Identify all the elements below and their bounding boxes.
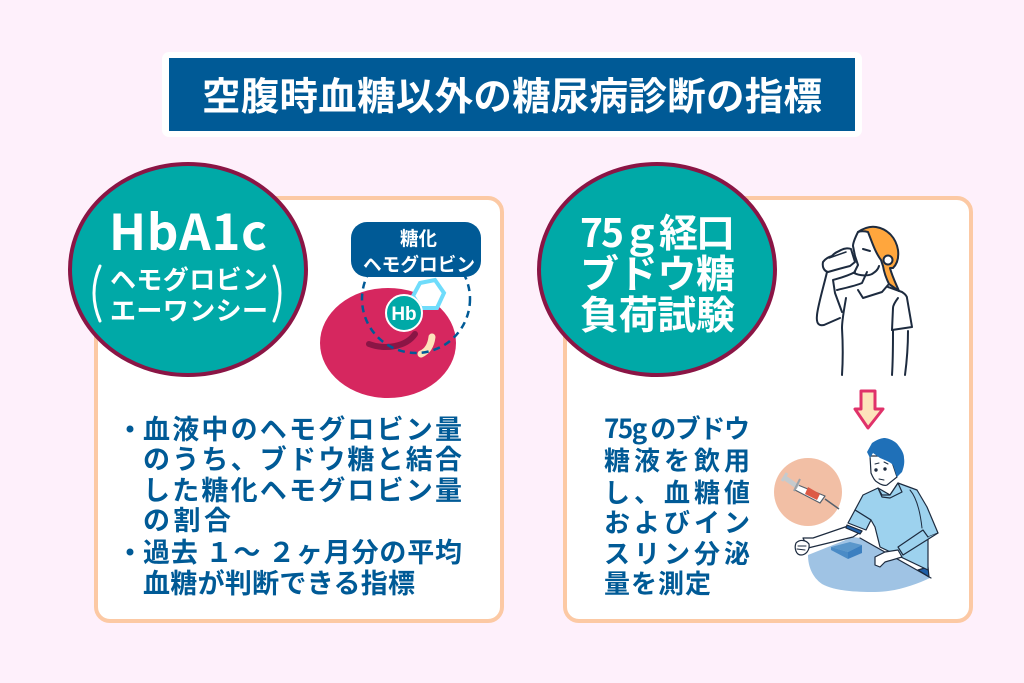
- cup and hand: [823, 248, 855, 272]
- right hand: [875, 550, 902, 567]
- illustration: glycated hemoglobin: [320, 222, 481, 398]
- text block: HbA1c description: 血糖が判断できる指標: [143, 562, 415, 601]
- badge: HbA1c: HbA1c: [109, 194, 267, 265]
- text block: 75g description: [604, 409, 750, 601]
- text block: 75g description: し、血糖値: [604, 473, 750, 510]
- badge: HbA1c: ヘモグロビン: [110, 260, 268, 297]
- arrow: down: [855, 391, 883, 428]
- text block: 75g description: スリン分泌: [604, 534, 750, 571]
- badge: 75g経口ブドウ糖負荷試験: 負荷試験: [580, 285, 735, 341]
- illustration: man having blood drawn: [795, 438, 938, 592]
- sweater: [855, 483, 938, 570]
- text block: 75g description: 量を測定: [604, 564, 711, 601]
- sleeve: [848, 510, 871, 530]
- text block: HbA1c description: 過去 １～ ２ヶ月分の平均: [143, 531, 462, 570]
- label: 糖化ヘモグロビン: 糖化: [400, 224, 437, 251]
- panel: HbA1c: [70, 164, 502, 621]
- block: [831, 542, 862, 552]
- text block: HbA1c description: [126, 408, 462, 601]
- badge: 75g経口ブドウ糖負荷試験: [539, 164, 775, 375]
- title banner: 空腹時血糖以外の糖尿病診断の指標: [202, 66, 822, 122]
- face: [853, 232, 879, 275]
- badge: HbA1c: エーワンシー: [110, 291, 268, 328]
- panel: 75g OGTT: [539, 164, 971, 621]
- collar and shirt: [858, 285, 888, 298]
- Hb circle: Hb: [391, 304, 417, 325]
- text block: 75g description: 75g のブドウ: [604, 409, 750, 446]
- hair: [858, 227, 899, 291]
- pants: [918, 567, 929, 577]
- face: [870, 456, 897, 485]
- arm and sleeve: [817, 272, 840, 325]
- panel background: [96, 198, 502, 621]
- text block: HbA1c description: のうち、ブドウ糖と結合: [143, 438, 462, 477]
- red blood cell: [320, 288, 456, 398]
- title banner: [165, 55, 859, 134]
- badge: 75g経口ブドウ糖負荷試験: 75ｇ経口: [580, 203, 735, 259]
- table: [808, 537, 930, 592]
- Hb circle: [386, 295, 422, 331]
- illustration: woman drinking: [817, 227, 912, 375]
- panel background: [565, 198, 971, 621]
- badge: HbA1c: [70, 164, 306, 375]
- illustration: syringe: [774, 458, 842, 526]
- text block: HbA1c description: 血液中のヘモグロビン量: [143, 408, 462, 447]
- cuff: [846, 525, 862, 534]
- fist: [795, 540, 809, 555]
- collar: [878, 483, 902, 498]
- text block: 75g description: およびイン: [604, 503, 750, 540]
- forearm: [803, 526, 862, 548]
- hair: [867, 438, 904, 477]
- label: 糖化ヘモグロビン: [351, 222, 481, 277]
- text block: 75g description: 糖液を飲用: [604, 441, 750, 478]
- label: 糖化ヘモグロビン: ヘモグロビン: [363, 250, 475, 277]
- text block: HbA1c description: した糖化ヘモグロビン量: [143, 469, 462, 508]
- badge: 75g経口ブドウ糖負荷試験: ブドウ糖: [580, 244, 735, 300]
- hexagon: [413, 280, 444, 308]
- text block: HbA1c description: の割合: [143, 499, 231, 538]
